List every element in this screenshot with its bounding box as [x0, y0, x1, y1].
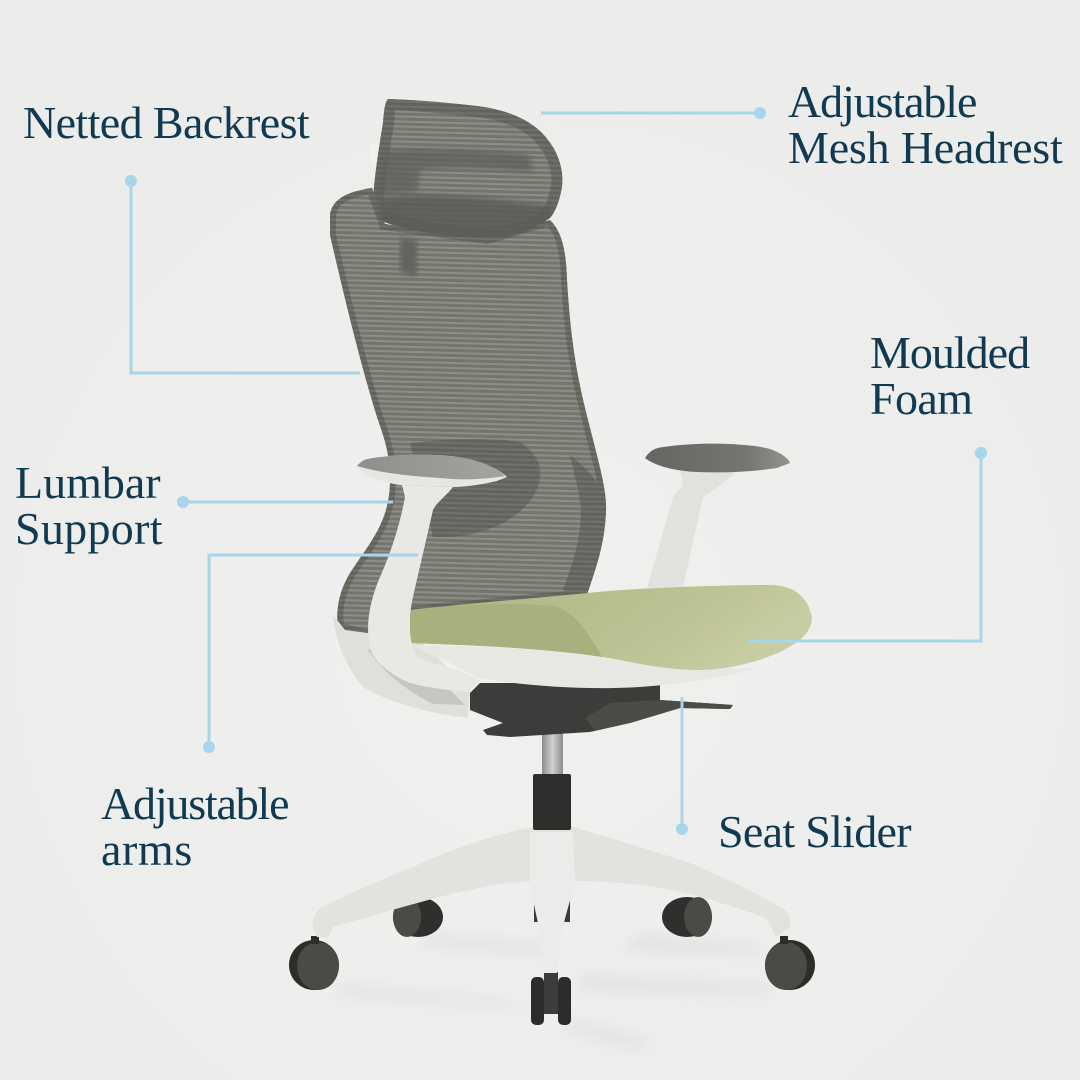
chair: backrest — [330, 188, 606, 633]
chair: headrest — [374, 99, 562, 238]
label: Lumbar Support: Support — [15, 503, 163, 554]
callout lines — [131, 113, 981, 829]
chair: back shell — [333, 615, 470, 718]
label: Netted Backrest: Netted Backrest — [23, 97, 309, 148]
chair: base brackets — [534, 890, 570, 922]
label: Seat Slider: Seat Slider — [718, 806, 911, 857]
label: Lumbar Support — [15, 457, 163, 554]
label: Moulded Foam — [870, 327, 1030, 424]
label: Adjustable arms: arms — [101, 824, 193, 875]
chair: star base — [313, 827, 790, 937]
label: Moulded Foam: Foam — [870, 373, 972, 424]
label: Adjustable arms: Adjustable — [101, 778, 288, 829]
chair: mechanism — [470, 683, 733, 737]
chair: far arm — [645, 444, 790, 588]
chair: seat cushion — [410, 585, 812, 670]
chair: rear casters — [393, 897, 712, 937]
chair: seat shell — [412, 645, 757, 688]
chair: near arm — [357, 455, 507, 692]
floor shadows — [335, 935, 770, 1050]
label: Adjustable arms — [101, 778, 288, 875]
callout dots — [125, 107, 987, 835]
chair illustration — [125, 99, 987, 1025]
label: Adjustable Mesh Headrest: Adjustable — [788, 76, 976, 127]
chair: front casters — [289, 936, 815, 1025]
chair: central base leg — [530, 832, 575, 973]
label: Adjustable Mesh Headrest — [788, 76, 1063, 173]
label: Lumbar Support: Lumbar — [15, 457, 161, 508]
label: Moulded Foam: Moulded — [870, 327, 1029, 378]
label: Adjustable Mesh Headrest: Mesh Headrest — [788, 122, 1063, 173]
chair: gas lift — [533, 730, 571, 830]
